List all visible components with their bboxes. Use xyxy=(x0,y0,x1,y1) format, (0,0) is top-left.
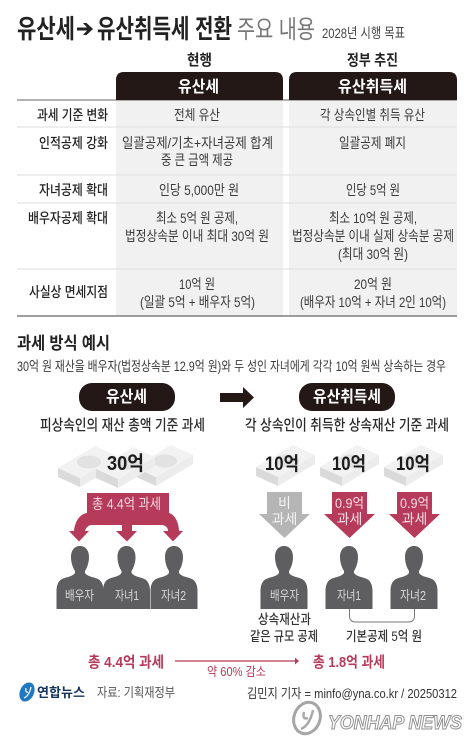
row: personal deduction: 중 큰 금액 제공 xyxy=(161,152,233,168)
watermark: Yonhap News: YONHAP NEWS xyxy=(328,713,462,734)
arrow: child 1 tax: 0.9억 xyxy=(335,495,364,511)
arrow: child 1 tax: 과세 xyxy=(337,511,362,527)
row: spouse deduction: 최소 5억 원 공제, xyxy=(156,210,238,226)
spouse deduction note: 상속재산과 xyxy=(258,612,311,627)
pill: acquisition tax xyxy=(299,383,395,411)
title: 2028년 시행 목표 xyxy=(322,25,405,41)
heirs left xyxy=(56,546,198,609)
money stacks 10 xyxy=(256,445,443,486)
arrow: child 2 tax xyxy=(389,492,440,538)
column heading: government plan: 정부 추진 xyxy=(347,52,398,69)
row: child deduction: 인당 5,000만 원 xyxy=(159,182,239,198)
arrow: child 2 tax: 0.9억 xyxy=(400,495,429,511)
split red arrows: 총 4.4억 과세 xyxy=(92,496,161,513)
heirs right: 자녀1 xyxy=(337,588,361,603)
pill: inheritance tax: 유산세 xyxy=(106,388,147,406)
spouse deduction note: 같은 규모 공제 xyxy=(250,629,318,644)
heirs left: 배우자 xyxy=(65,588,94,603)
total after: 총 1.8억 과세 xyxy=(313,654,385,671)
row: spouse deduction: 법정상속분 이내 최대 30억 원 xyxy=(125,228,269,244)
row: personal deduction xyxy=(39,135,406,168)
watermark: Yonhap News xyxy=(289,699,462,737)
comparison table xyxy=(17,52,457,316)
row: child deduction: 자녀공제 확대 xyxy=(39,182,108,198)
split red arrows xyxy=(69,493,183,542)
total before: 총 4.4억 과세 xyxy=(88,654,164,671)
money stacks 10: 10억 xyxy=(332,453,366,475)
heirs right: 자녀2 xyxy=(400,588,426,603)
row: spouse deduction: 최소 10억 원 공제, xyxy=(329,210,417,226)
bracket: children deduction xyxy=(346,609,422,644)
bracket: children deduction: 기본공제 5억 원 xyxy=(346,629,422,644)
arrow: transition xyxy=(220,387,254,408)
row: tax-free threshold: (일괄 5억 + 배우자 5억) xyxy=(140,294,255,310)
row: tax-free threshold: 20억 원 xyxy=(354,276,392,292)
reduction arrow: 약 60% 감소 xyxy=(207,664,266,679)
heirs right xyxy=(260,546,438,609)
arrow: spouse tax free xyxy=(259,492,310,538)
icon: money stacks 30 xyxy=(58,445,193,488)
row: child deduction xyxy=(39,182,400,198)
row: spouse deduction xyxy=(28,210,454,262)
row: spouse deduction: (최대 30억 원) xyxy=(338,246,408,262)
arrow: spouse tax free: 비 xyxy=(278,495,291,511)
header: acquisition tax xyxy=(289,72,457,100)
row: spouse deduction: 배우자공제 확대 xyxy=(28,210,108,226)
title: 유산취득세 전환 xyxy=(97,14,232,44)
title xyxy=(17,14,405,44)
row: tax-free threshold xyxy=(29,276,446,310)
title: 주요 내용 xyxy=(237,16,315,44)
section heading: example: 과세 방식 예시 xyxy=(17,334,110,353)
spouse deduction note xyxy=(250,612,318,644)
arrow: child 2 tax: 과세 xyxy=(402,511,427,527)
column heading: current: 현행 xyxy=(187,52,212,69)
row: tax basis: 각 상속인별 취득 유산 xyxy=(320,107,425,123)
header: inheritance tax xyxy=(116,72,283,100)
logo: Yonhap News: 연합뉴스 xyxy=(37,685,85,700)
heirs left: 자녀2 xyxy=(161,588,186,603)
row: tax-free threshold: (배우자 10억 + 자녀 2인 10억) xyxy=(300,294,446,310)
row: personal deduction: 인적공제 강화 xyxy=(39,135,108,151)
row: tax-free threshold: 10억 원 xyxy=(179,276,215,292)
pill: acquisition tax: 유산취득세 xyxy=(313,388,381,406)
left basis text: 피상속인의 재산 총액 기준 과세 xyxy=(40,417,205,434)
header: inheritance tax: 유산세 xyxy=(178,78,219,96)
arrow: spouse tax free: 과세 xyxy=(272,511,297,527)
money stacks 10: 10억 xyxy=(396,453,430,475)
reduction arrow xyxy=(175,658,299,679)
title arrow xyxy=(77,23,93,35)
source: 자료: 기획재정부 xyxy=(97,685,175,700)
logo: Yonhap News xyxy=(16,680,85,704)
pill: inheritance tax xyxy=(79,383,175,411)
money stacks 10: 10억 xyxy=(265,453,299,475)
header: acquisition tax: 유산취득세 xyxy=(338,78,407,96)
row: personal deduction: 일괄공제/기초+자녀공제 합계 xyxy=(122,135,273,151)
row: tax-free threshold: 사실상 면세지점 xyxy=(29,284,108,300)
row: tax basis xyxy=(37,107,425,123)
title: 유산세 xyxy=(17,14,75,44)
row: child deduction: 인당 5억 원 xyxy=(346,182,400,198)
arrow: child 1 tax xyxy=(324,492,375,538)
heirs left: 자녀1 xyxy=(115,588,139,603)
row: tax basis: 전체 유산 xyxy=(174,107,220,123)
heirs right: 배우자 xyxy=(270,588,299,603)
icon: money stacks 30: 30억 xyxy=(107,452,144,475)
row: tax basis: 과세 기준 변화 xyxy=(37,107,108,123)
row: personal deduction: 일괄공제 폐지 xyxy=(339,135,406,151)
